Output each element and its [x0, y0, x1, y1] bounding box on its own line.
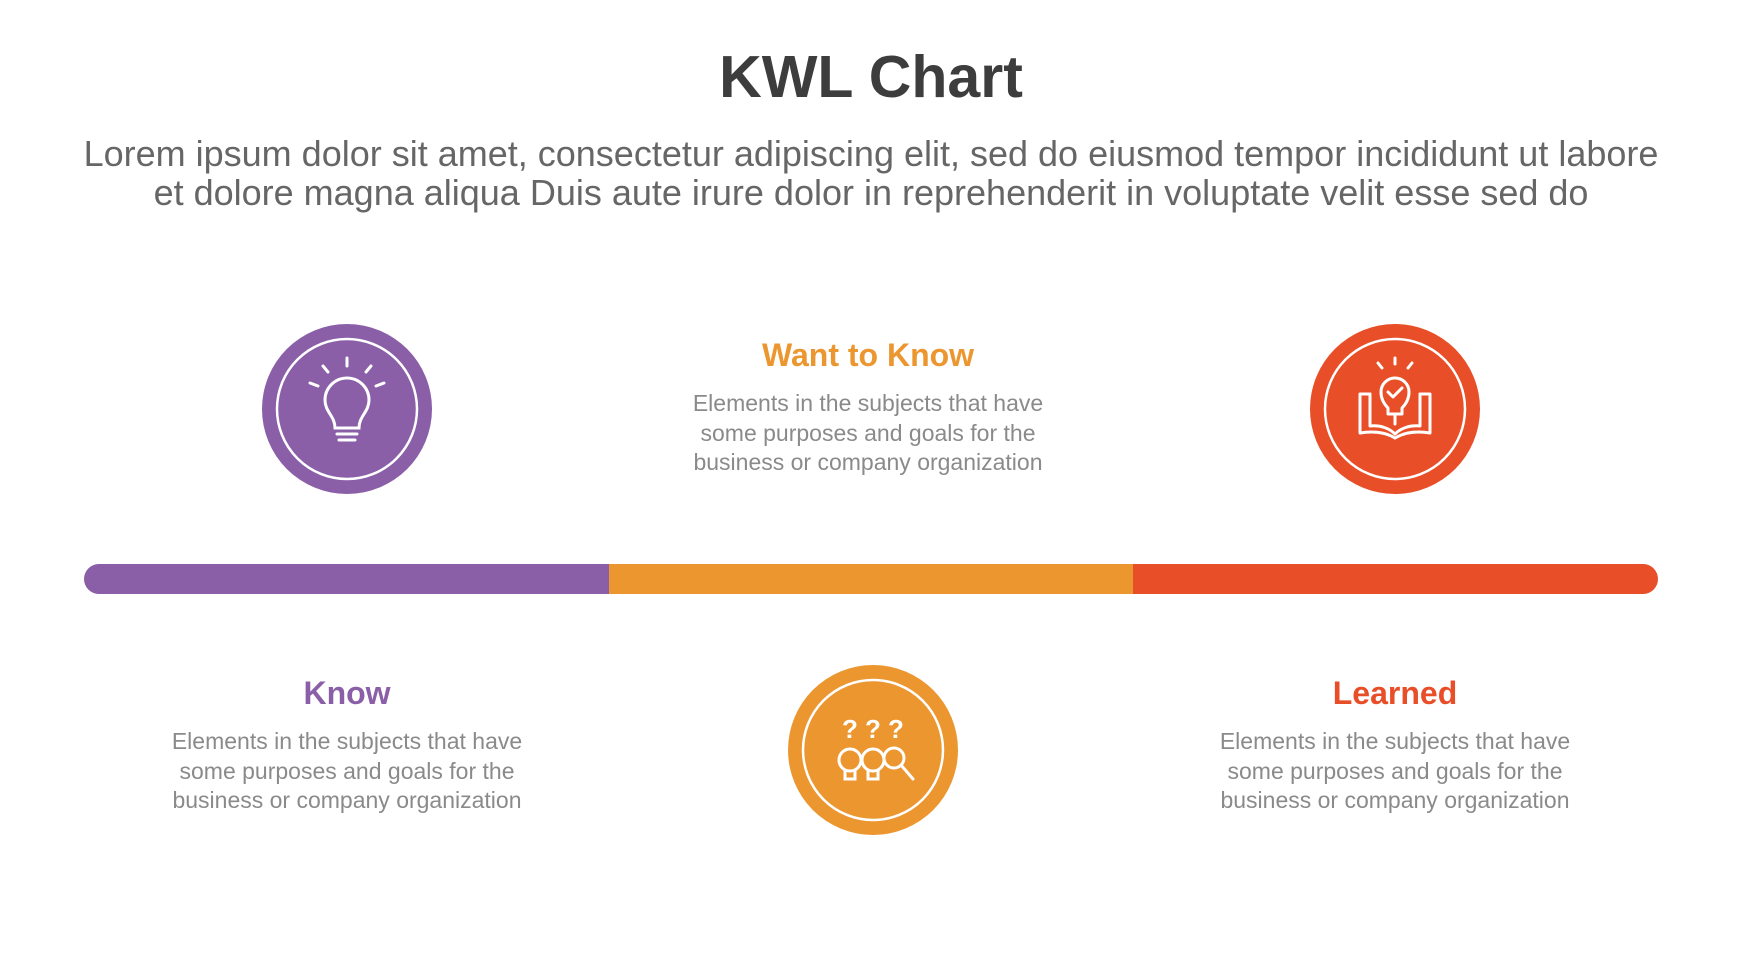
subtitle: et dolore magna aliqua Duis aute irure dolor in reprehenderit in voluptate velit esse sed do — [154, 172, 1588, 213]
text block: Know — [172, 675, 522, 813]
heading: Want to Know: Want to Know — [762, 337, 974, 373]
body text: Learned: Elements in the subjects that have — [1220, 728, 1570, 754]
icon: book with bulb (Learned) — [1310, 324, 1480, 494]
body text: Know: Elements in the subjects that have — [172, 728, 522, 754]
body text: Know: some purposes and goals for the — [180, 758, 514, 784]
body text: Want to Know: Elements in the subjects that have — [693, 390, 1043, 416]
body text: Learned — [1220, 728, 1570, 813]
body text: Know: business or company organization — [172, 787, 522, 813]
subtitle: Lorem ipsum dolor sit amet, consectetur adipiscing elit, sed do eiusmod tempor incididunt ut labore — [84, 133, 1658, 174]
icon: questions (Want to Know): ? — [865, 714, 881, 744]
text block: Want to Know — [693, 337, 1043, 475]
body text: Learned: business or company organization — [1220, 787, 1570, 813]
icon: questions (Want to Know): ? — [842, 714, 858, 744]
title: KWL Chart — [719, 44, 1023, 110]
heading: Know: Know — [303, 675, 391, 711]
heading: Learned: Learned — [1333, 675, 1457, 711]
icon: lightbulb (Know) — [262, 324, 432, 494]
icon: questions (Want to Know) — [788, 665, 958, 835]
icon: questions (Want to Know): ? — [888, 714, 904, 744]
timeline bar — [84, 564, 1658, 594]
text block: Learned — [1220, 675, 1570, 813]
body text: Want to Know — [693, 390, 1043, 475]
body text: Know — [172, 728, 522, 813]
body text: Learned: some purposes and goals for the — [1228, 758, 1562, 784]
body text: Want to Know: business or company organization — [693, 449, 1043, 475]
subtitle — [84, 133, 1658, 213]
body text: Want to Know: some purposes and goals for the — [700, 420, 1035, 446]
